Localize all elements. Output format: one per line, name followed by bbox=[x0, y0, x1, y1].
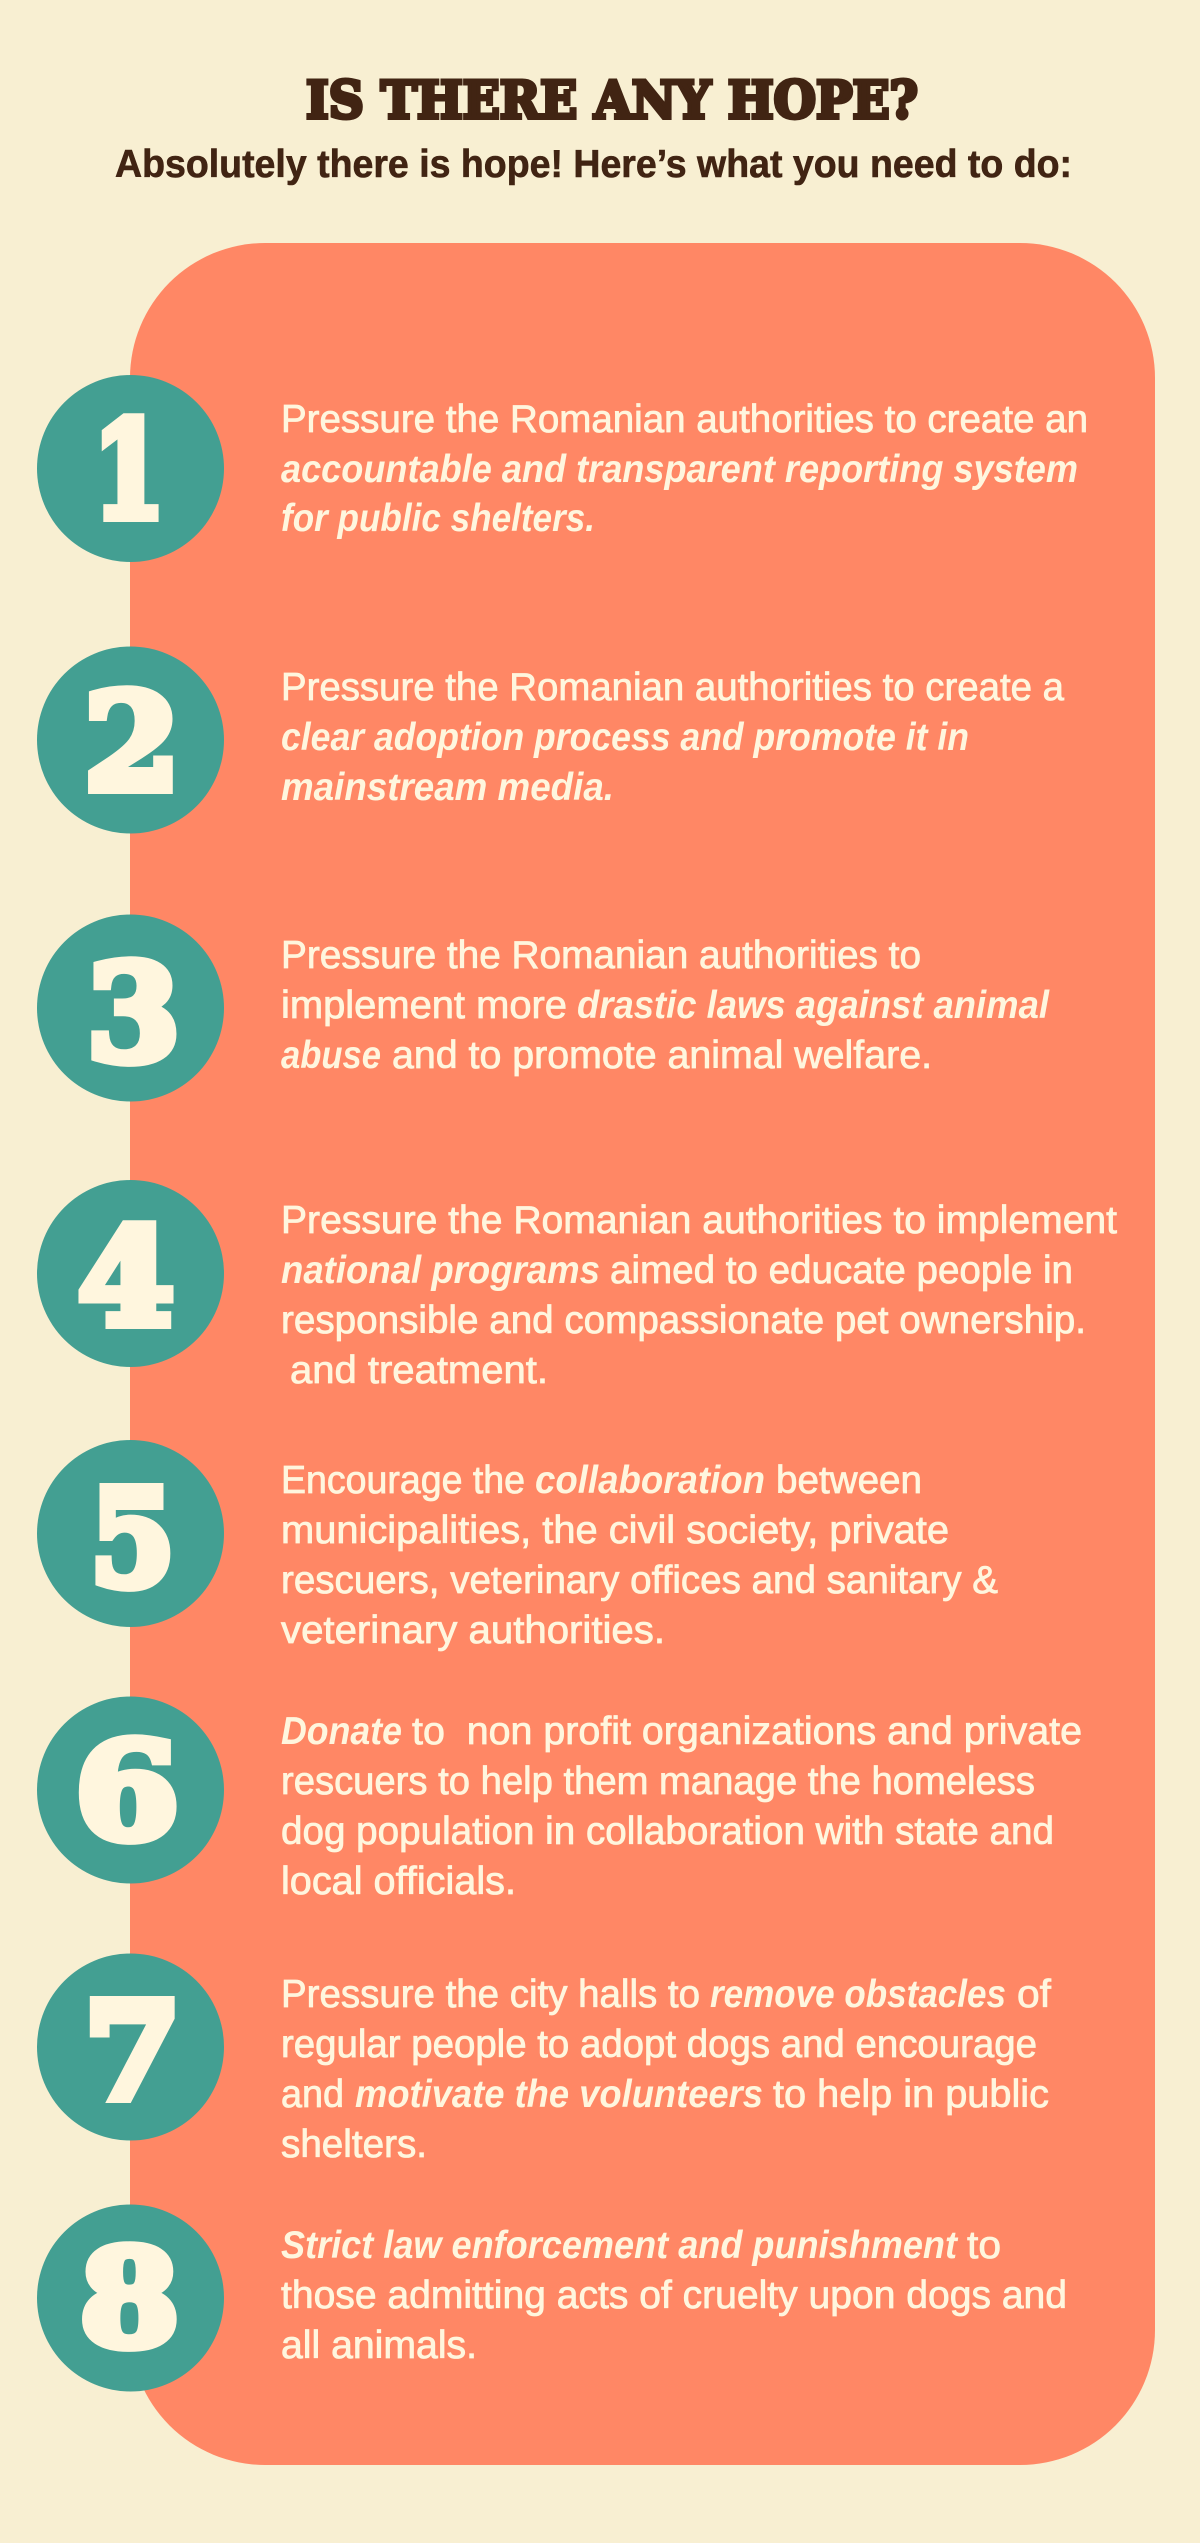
text: step 7: shelters. bbox=[281, 2123, 427, 2166]
text: step 1 bbox=[281, 398, 1088, 540]
number badge 2: 2 bbox=[84, 665, 180, 821]
text: step 2 bbox=[281, 666, 1064, 809]
text: step 3: abuse bbox=[281, 1034, 381, 1077]
number badge 7 bbox=[37, 1954, 224, 2140]
text: step 6: local officials. bbox=[281, 1860, 516, 1903]
text: step 2: mainstream media. bbox=[281, 766, 614, 809]
panel: coral background bbox=[130, 243, 1155, 2465]
number badge 4: 4 bbox=[78, 1200, 174, 1356]
text: step 4: responsible and compassionate pet ownership. bbox=[281, 1299, 1086, 1342]
number badge 8 bbox=[37, 2204, 224, 2392]
number badge 6 bbox=[37, 1696, 224, 1884]
step 3 bbox=[37, 914, 1050, 1102]
number badge 1 bbox=[37, 375, 224, 562]
text: step 3 bbox=[281, 934, 1050, 1077]
step 2 bbox=[37, 646, 1064, 834]
number badge 6: 6 bbox=[75, 1714, 179, 1870]
number badge 5: 5 bbox=[90, 1461, 175, 1617]
title: IS THERE ANY HOPE? bbox=[306, 71, 918, 131]
text: step 3: Pressure the Romanian authorities to bbox=[281, 934, 921, 977]
text: step 5: veterinary authorities. bbox=[281, 1609, 665, 1652]
text: step 4: national programs bbox=[281, 1249, 600, 1292]
subtitle: Absolutely there is hope! Here’s what you need to do: bbox=[115, 143, 1072, 186]
text: step 1: Pressure the Romanian authorities to create an bbox=[281, 398, 1088, 441]
number badge 1: 1 bbox=[93, 393, 165, 549]
number badge 3 bbox=[37, 914, 224, 1102]
text: step 8: to bbox=[967, 2224, 1001, 2267]
text: step 7: to help in public bbox=[773, 2073, 1049, 2116]
step 7 bbox=[37, 1954, 1051, 2166]
text: step 1: accountable and transparent reporting system bbox=[281, 448, 1078, 491]
text: step 8: Strict law enforcement and punishment bbox=[281, 2224, 959, 2267]
text: step 5: collaboration bbox=[535, 1459, 765, 1502]
number badge 7: 7 bbox=[84, 1974, 181, 2130]
text: step 7: regular people to adopt dogs and encourage bbox=[281, 2023, 1037, 2066]
text: step 2: Pressure the Romanian authorities to create a bbox=[281, 666, 1064, 709]
text: step 4: Pressure the Romanian authorities to implement bbox=[281, 1199, 1117, 1242]
text: step 6: Donate bbox=[281, 1710, 402, 1753]
text: step 3: and to promote animal welfare. bbox=[392, 1034, 932, 1077]
text: step 5: municipalities, the civil society, private bbox=[281, 1509, 949, 1552]
text: step 3: drastic laws against animal bbox=[577, 984, 1050, 1027]
text: step 6 bbox=[281, 1710, 1082, 1903]
number badge 4 bbox=[37, 1180, 224, 1367]
text: step 8: those admitting acts of cruelty upon dogs and bbox=[281, 2274, 1067, 2317]
text: step 3: implement more bbox=[281, 984, 567, 1027]
text: step 4: aimed to educate people in bbox=[610, 1249, 1073, 1292]
text: step 2: clear adoption process and promote it in bbox=[281, 716, 969, 759]
text: step 5 bbox=[281, 1459, 998, 1652]
step 1 bbox=[37, 375, 1088, 562]
number badge 5 bbox=[37, 1440, 224, 1627]
step 6 bbox=[37, 1696, 1082, 1903]
text: step 7 bbox=[281, 1973, 1051, 2166]
text: step 4 bbox=[281, 1199, 1117, 1392]
step 4 bbox=[37, 1180, 1117, 1392]
text: step 4: and treatment. bbox=[290, 1349, 548, 1392]
number badge 3: 3 bbox=[87, 936, 180, 1092]
number badge 2 bbox=[37, 646, 224, 834]
text: step 6: to non profit organizations and private bbox=[412, 1710, 1082, 1753]
text: step 5: rescuers, veterinary offices and sanitary & bbox=[281, 1559, 998, 1602]
text: step 7: remove obstacles bbox=[710, 1973, 1006, 2016]
text: step 5: Encourage the bbox=[281, 1459, 525, 1502]
text: step 6: rescuers to help them manage the homeless bbox=[281, 1760, 1035, 1803]
number badge 8: 8 bbox=[80, 2221, 179, 2377]
step 5 bbox=[37, 1440, 998, 1652]
text: step 6: dog population in collaboration with state and bbox=[281, 1810, 1054, 1853]
text: step 1: for public shelters. bbox=[281, 497, 595, 540]
text: step 5: between bbox=[776, 1459, 922, 1502]
text: step 7: motivate the volunteers bbox=[355, 2073, 763, 2116]
text: step 8: all animals. bbox=[281, 2324, 477, 2367]
text: step 7: of bbox=[1017, 1973, 1051, 2016]
text: step 7: Pressure the city halls to bbox=[281, 1973, 700, 2016]
text: step 7: and bbox=[281, 2073, 344, 2116]
step 8 bbox=[37, 2204, 1067, 2392]
text: step 8 bbox=[281, 2224, 1067, 2367]
